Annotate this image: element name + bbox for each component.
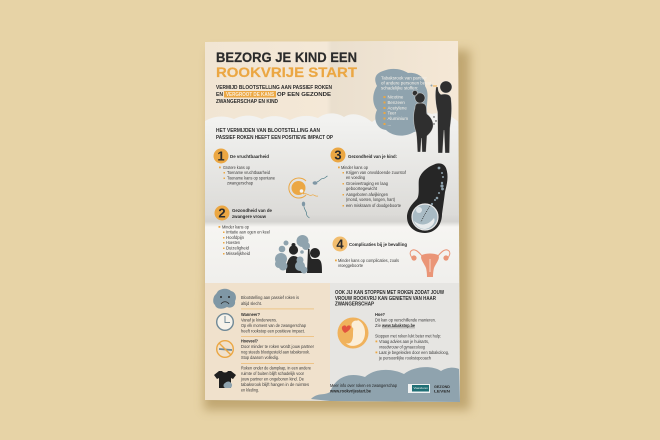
heading: ook jij kan stoppen: OOK JIJ KAN STOPPEN MET ROKEN ZODAT JOUW bbox=[335, 290, 444, 296]
footer link text: www.rookvrijestart.be bbox=[329, 388, 371, 394]
block: hoe: je persoonlijke rookstopcoach bbox=[378, 356, 432, 360]
icon: belly with fetus bbox=[407, 163, 448, 233]
icon: smoke cloud with list: Tabaksrook van partner bbox=[381, 76, 427, 80]
section heading: HET VERMIJDEN VAN BLOOTSTELLING AAN bbox=[216, 128, 320, 134]
block: de vruchtbaarheid: De vruchtbaarheid bbox=[230, 154, 269, 159]
icon: smoke cloud with list: schadelijke stoffen: bbox=[381, 86, 418, 90]
poster base bbox=[205, 41, 460, 402]
icon: smoke cloud with list: Benzeen bbox=[388, 100, 405, 105]
block: gezondheid kind: Gezondheid van je kind: bbox=[348, 154, 398, 159]
block: dampkap bbox=[240, 366, 311, 392]
title: BEZORG JE KIND EEN bbox=[216, 50, 357, 65]
block: gezondheid zwangere vrouw bbox=[218, 208, 273, 256]
block: hoeveel bbox=[241, 338, 314, 360]
subtitle: ZWANGERSCHAP EN KIND bbox=[216, 99, 278, 105]
man bbox=[435, 81, 452, 153]
icon: t-shirt bbox=[214, 371, 236, 388]
icon: clock bbox=[217, 314, 233, 330]
block: hoe: Dit kan op verschillende manieren. bbox=[375, 318, 436, 322]
block: altijd slecht: Blootstelling aan passief roken is bbox=[241, 295, 300, 300]
block: hoeveel: nog steeds blootgesteld aan tabaksrook. bbox=[241, 350, 310, 354]
icon: smoke cloud with list: Nicotine bbox=[388, 94, 404, 100]
block: gezondheid kind: (mond, voeten, longen, hart) bbox=[346, 197, 395, 202]
block: hoeveel: Hoeveel? bbox=[241, 338, 258, 344]
block: altijd slecht bbox=[241, 295, 300, 306]
heading: ook jij kan stoppen bbox=[335, 290, 444, 308]
block: complicaties bbox=[335, 242, 407, 268]
icon: smoke cloud with list: Acetylene bbox=[388, 106, 407, 110]
block: hoe: Vraag advies aan je huisarts, bbox=[379, 339, 429, 344]
logo: vlaanderen bbox=[408, 384, 430, 393]
block: hoe: Zie bbox=[375, 323, 382, 328]
icon: smoke cloud with list bbox=[373, 69, 432, 136]
logo: vlaanderen: Vlaanderen bbox=[414, 386, 428, 390]
icon: couple in smoke bbox=[275, 235, 322, 274]
woman bbox=[412, 90, 433, 152]
block: de vruchtbaarheid: Grotere kans op bbox=[223, 165, 250, 170]
block: gezondheid kind bbox=[338, 154, 407, 208]
divider bbox=[241, 335, 314, 338]
block: de vruchtbaarheid: Toename kans op spontane bbox=[227, 176, 275, 180]
block: complicaties: Complicaties bij je bevalling bbox=[349, 242, 407, 247]
icon: smoke cloud with list: Teer bbox=[388, 110, 397, 116]
block: gezondheid zwangere vrouw: Hoesten bbox=[226, 240, 240, 245]
block: gezondheid zwangere vrouw: Duizeligheid bbox=[226, 246, 250, 250]
icon: couple silhouette bbox=[412, 81, 452, 153]
block: wanneer: heeft rookstop een positieve impact. bbox=[241, 328, 305, 334]
logo: gezond leven: LEVEN bbox=[434, 390, 451, 394]
block: de vruchtbaarheid bbox=[219, 154, 275, 186]
block: wanneer: Wanneer? bbox=[241, 312, 260, 317]
icon: no smoking bbox=[217, 341, 233, 357]
icon: sad cloud bbox=[213, 289, 236, 309]
block: altijd slecht: altijd slecht. bbox=[241, 301, 262, 306]
block: gezondheid kind: Krijgen van onvoldoende zuurstof bbox=[346, 170, 407, 175]
panel: bottom right bbox=[330, 283, 459, 402]
logo: gezond leven: GEZOND bbox=[434, 385, 450, 389]
number 2 bbox=[214, 206, 230, 220]
block: hoe bbox=[375, 312, 449, 360]
block: dampkap: Roken onder de dampkap, in een andere bbox=[241, 366, 311, 370]
block: gezondheid zwangere vrouw: zwangere vrouw bbox=[232, 214, 267, 219]
divider bbox=[241, 308, 314, 310]
block: wanneer: Op elk moment van de zwangerschap bbox=[241, 323, 306, 328]
block: hoe: www.tabakstop.be bbox=[381, 323, 415, 328]
number 4: 4 bbox=[336, 236, 344, 252]
block: gezondheid kind: en voeding bbox=[346, 175, 365, 180]
divider bbox=[241, 362, 314, 364]
subtitle: VERMIJD BLOOTSTELLING AAN PASSIEF ROKEN bbox=[216, 85, 332, 91]
number 3 bbox=[330, 148, 346, 162]
block: dampkap: jouw partner en ongeboren kind. De bbox=[240, 376, 305, 382]
block: gezondheid zwangere vrouw: Irritatie aan ogen en keel bbox=[226, 230, 270, 234]
block: hoeveel: Door minder te roken wordt jouw partner bbox=[241, 344, 314, 349]
block: de vruchtbaarheid: Toename vruchtbaarheid bbox=[227, 170, 270, 175]
block: hoe: Hoe? bbox=[375, 312, 385, 317]
title bbox=[216, 50, 358, 80]
panel: bottom left bbox=[205, 283, 330, 400]
block: wanneer: Vanaf je kinderwens. bbox=[241, 318, 277, 322]
footer link text bbox=[329, 383, 397, 394]
number 1 bbox=[214, 148, 228, 164]
number 2: 2 bbox=[218, 206, 226, 220]
poster bbox=[205, 41, 460, 402]
block: gezondheid zwangere vrouw: Gezondheid van de bbox=[232, 208, 273, 213]
footer link text: Meer info over roken en zwangerschap bbox=[330, 383, 397, 388]
icon: fetus with heart bbox=[338, 318, 368, 348]
number 1: 1 bbox=[217, 148, 225, 164]
block: hoe: vroedvrouw of gynaecoloog bbox=[379, 344, 425, 350]
block: gezondheid zwangere vrouw: Minder kans op bbox=[222, 224, 249, 230]
section heading: PASSIEF ROKEN HEEFT EEN POSITIEVE IMPACT OP bbox=[216, 135, 334, 141]
icon: smoke cloud with list: ... bbox=[388, 122, 391, 126]
number 3: 3 bbox=[334, 148, 342, 162]
block: hoe: Stoppen met roken lukt beter met hulp: bbox=[375, 334, 441, 338]
icon: smoke cloud with list: of andere personen bevat bbox=[381, 80, 432, 86]
block: de vruchtbaarheid: zwangerschap bbox=[227, 180, 254, 186]
block: hoeveel: Stop daarom volledig. bbox=[241, 355, 279, 360]
subtitle: EN bbox=[216, 92, 223, 98]
blue cloud footer bbox=[311, 367, 460, 402]
block: dampkap: en kleding. bbox=[241, 388, 259, 392]
block: complicaties: vroeggeboorte bbox=[338, 263, 363, 268]
icon: egg and sperm bbox=[289, 176, 328, 218]
block: gezondheid zwangere vrouw: Misselijkheid bbox=[226, 251, 251, 256]
block: gezondheid kind: Minder kans op bbox=[341, 165, 368, 170]
number 4 bbox=[332, 236, 348, 252]
block: gezondheid kind: Groeivertraging en laag bbox=[346, 181, 389, 186]
block: gezondheid kind: Aangeboren afwijkingen bbox=[346, 192, 388, 197]
title: ROOKVRIJE START bbox=[216, 65, 358, 80]
block: hoe: Laat je begeleiden door een tabakoloog, bbox=[379, 350, 449, 355]
block: dampkap: tabaksrook blijft hangen in de ruimtes bbox=[241, 382, 310, 387]
icon: uterus bbox=[410, 250, 450, 277]
panel: header bbox=[205, 41, 458, 122]
subtitle: OP EEN GEZONDE bbox=[277, 92, 332, 98]
subtitle: VERGROOT DE KANS bbox=[226, 92, 275, 98]
heading: ook jij kan stoppen: VROUW ROOKVRIJ KAN GENIETEN VAN HAAR bbox=[335, 296, 436, 302]
block: wanneer bbox=[241, 312, 306, 334]
block: gezondheid kind: geboortegewicht bbox=[346, 186, 378, 191]
block: gezondheid zwangere vrouw: Hoofdpijn bbox=[226, 235, 245, 240]
logo: gezond leven bbox=[434, 385, 451, 394]
block: dampkap: ruimte of buiten blijft schadelijk voor bbox=[241, 371, 304, 376]
heading: ook jij kan stoppen: ZWANGERSCHAP bbox=[335, 302, 375, 308]
block: gezondheid kind: een miskraam of doodgeboorte bbox=[346, 203, 401, 208]
section heading bbox=[216, 128, 334, 141]
subtitle bbox=[216, 85, 332, 105]
icon: smoke cloud with list: Aluminium bbox=[388, 116, 408, 121]
poster shadow bbox=[204, 50, 470, 410]
block: complicaties: Minder kans op complicaties, zoals bbox=[338, 258, 400, 263]
